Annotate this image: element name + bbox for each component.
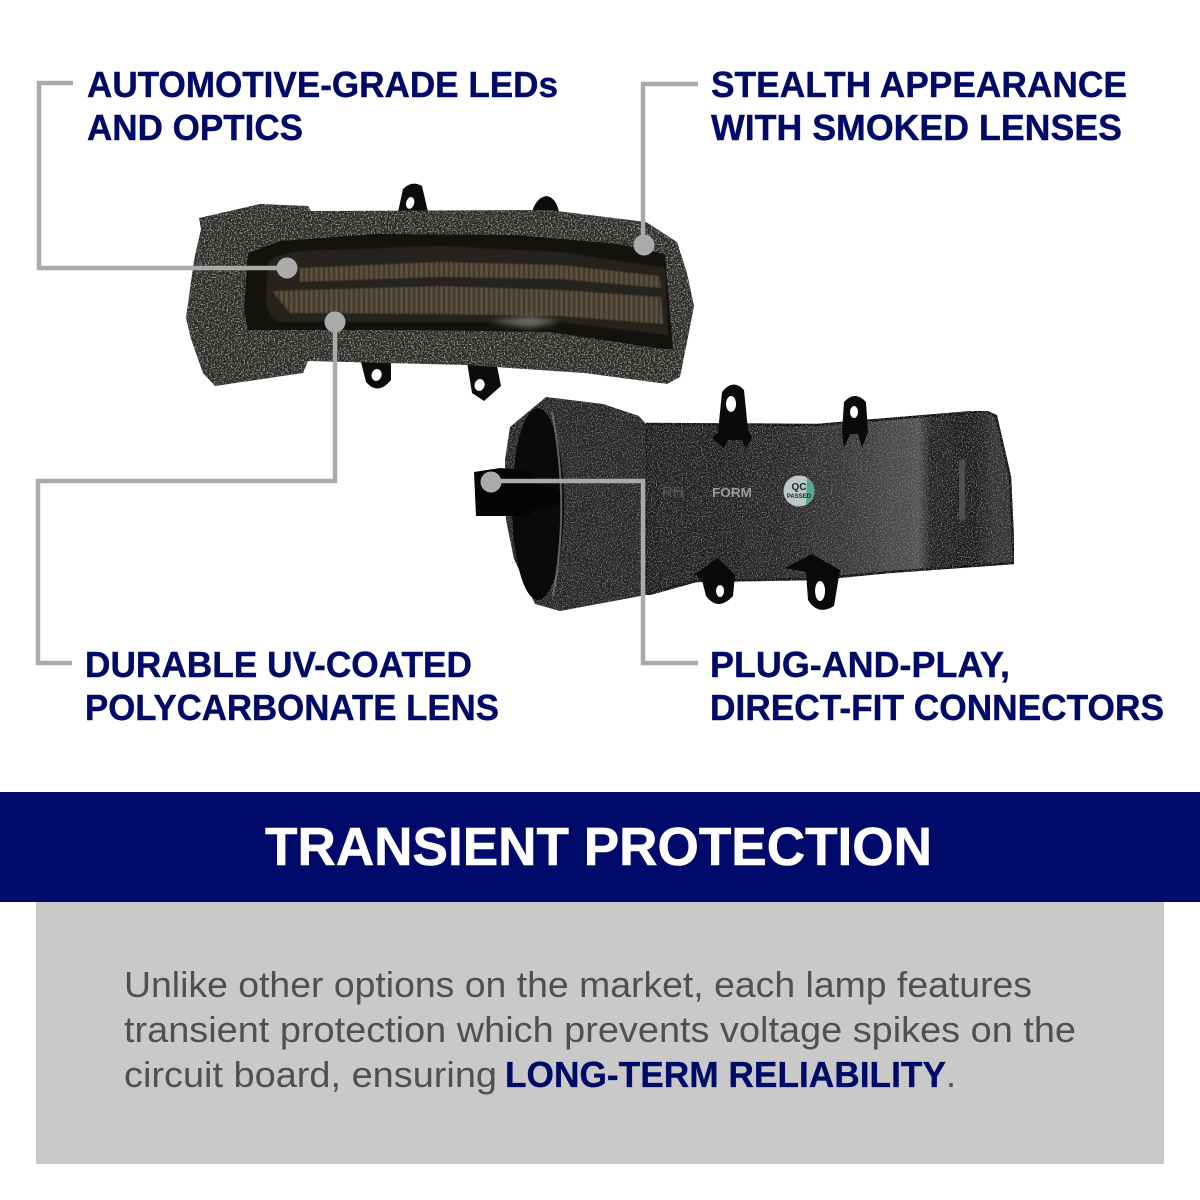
lens inner glass	[266, 246, 668, 335]
moulded text RH: RH	[662, 484, 684, 501]
smoked lens	[244, 234, 673, 349]
banner: transient protection	[0, 792, 1200, 902]
label: durable polycarbonate lens	[85, 644, 499, 728]
label: stealth appearance	[711, 64, 1127, 148]
label: automotive-grade LEDs and optics: AND OPTICS	[87, 107, 303, 148]
panel: description	[36, 902, 1164, 1164]
callout line: LEDs and optics	[39, 83, 298, 278]
lens reflection	[490, 316, 560, 328]
description text: circuit board, ensuring	[124, 1054, 497, 1095]
LED strips	[272, 262, 663, 324]
description text: transient protection which prevents voltage spikes on the	[124, 1009, 1076, 1050]
label: automotive-grade LEDs and optics	[87, 64, 558, 148]
cup rim highlight	[552, 412, 561, 596]
QC passed sticker: QC	[792, 482, 806, 493]
label: automotive-grade LEDs and optics: AUTOMOTIVE-GRADE LEDs	[87, 64, 558, 105]
cup opening	[512, 408, 564, 600]
callout line: connectors	[480, 472, 698, 663]
callout line: smoked lenses	[634, 84, 698, 256]
description text: .	[946, 1054, 956, 1095]
label: stealth appearance: WITH SMOKED LENSES	[711, 107, 1122, 148]
product: rear lamp housing	[474, 384, 1014, 611]
label: plug-and-play connectors	[710, 644, 1164, 728]
banner: transient protection: TRANSIENT PROTECTION	[265, 817, 932, 877]
description text: LONG-TERM RELIABILITY	[505, 1054, 946, 1095]
label: plug-and-play connectors: PLUG-AND-PLAY,	[710, 644, 1010, 685]
label: plug-and-play connectors: DIRECT-FIT CONNECTORS	[710, 687, 1164, 728]
label: durable polycarbonate lens: POLYCARBONATE LENS	[85, 687, 499, 728]
QC passed sticker: PASSED	[787, 494, 812, 500]
rear housing body	[646, 411, 1014, 595]
mounting tabs, front lamp	[360, 184, 559, 401]
moulded text FORM: FORM	[712, 486, 752, 500]
description text	[124, 964, 1076, 1095]
lamp housing, front	[186, 204, 694, 386]
slot detail	[959, 459, 965, 521]
connector	[474, 468, 560, 516]
callout line: polycarbonate lens	[38, 312, 346, 663]
rear housing cup	[505, 397, 646, 611]
QC passed sticker	[784, 476, 814, 506]
label: stealth appearance: STEALTH APPEARANCE	[711, 64, 1127, 105]
description text: Unlike other options on the market, each lamp features	[124, 964, 1032, 1005]
label: durable polycarbonate lens: DURABLE UV-COATED	[85, 644, 472, 685]
mounting tabs, rear lamp	[695, 384, 868, 610]
product: front lamp with smoked lens	[186, 184, 694, 401]
